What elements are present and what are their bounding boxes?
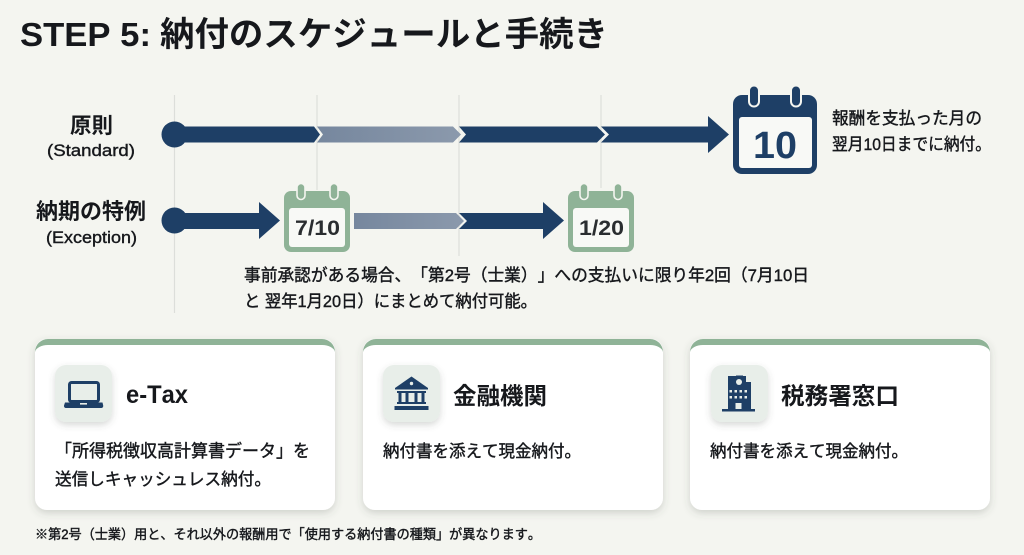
row label: 原則 (Standard) <box>47 114 135 160</box>
icon: calendar 10 <box>733 86 817 174</box>
standard description: 翌月10日までに納付。 <box>832 135 991 154</box>
heading: e-Tax: e-Tax <box>126 381 188 409</box>
row label: 原則 (Standard): 原則 <box>70 114 113 138</box>
icon: calendar 10: 10 <box>753 125 797 167</box>
icon: calendar 7/10 <box>284 184 350 252</box>
standard description <box>832 109 991 154</box>
exception description <box>244 266 809 311</box>
icon: calendar 1/20 <box>568 184 634 252</box>
standard timeline arrow <box>162 116 729 153</box>
title: 納付のスケジュールと手続き <box>160 16 608 54</box>
text: 金融機関 description: 納付書を添えて現金納付。 <box>383 442 581 461</box>
icon: tax office building <box>711 365 768 422</box>
title: STEP 5: <box>20 16 151 53</box>
exception description: と 翌年1月20日）にまとめて納付可能。 <box>244 292 537 311</box>
heading: 税務署窓口: 税務署窓口 <box>781 383 899 409</box>
text: e-Tax description: 送信しキャッシュレス納付。 <box>55 470 271 489</box>
standard description: 報酬を支払った月の <box>832 109 982 128</box>
text: 税務署窓口 description: 納付書を添えて現金納付。 <box>710 442 908 461</box>
icon: calendar 7/10: 7/10 <box>295 217 340 240</box>
icon: calendar 1/20: 1/20 <box>579 217 624 240</box>
text: e-Tax description <box>55 441 310 489</box>
row label: 納期の特例 (Exception) <box>36 199 146 247</box>
footnote: ※第2号（士業）用と、それ以外の報酬用で「使用する納付書の種類」が異なります。 <box>35 526 541 542</box>
row label: 原則 (Standard): (Standard) <box>47 141 135 160</box>
exception timeline arrows <box>162 202 564 239</box>
heading: 金融機関: 金融機関 <box>453 383 547 409</box>
icon: bank <box>383 365 440 422</box>
row label: 納期の特例 (Exception): 納期の特例 <box>36 199 146 224</box>
panel: 金融機関 <box>363 339 663 510</box>
icon: laptop <box>55 365 112 422</box>
panel: e-Tax <box>35 339 335 510</box>
panel: 税務署窓口 <box>690 339 990 510</box>
row label: 納期の特例 (Exception): (Exception) <box>46 228 137 247</box>
exception description: 事前承認がある場合、「第2号（士業）」への支払いに限り年2回（7月10日 <box>244 266 809 285</box>
text: e-Tax description: 「所得税徴収高計算書データ」を <box>55 441 310 461</box>
